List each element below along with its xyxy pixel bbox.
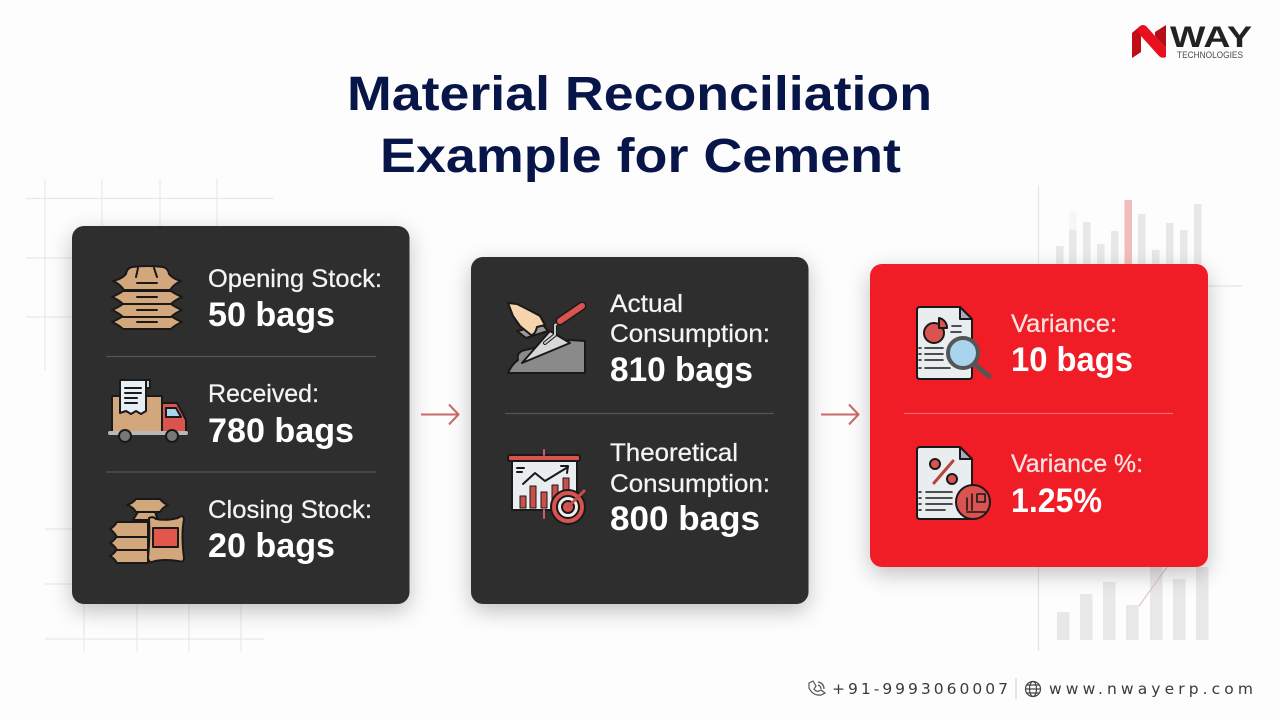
text: closing stock: Closing Stock: bbox=[208, 496, 372, 524]
text: opening stock: Opening Stock: bbox=[208, 265, 382, 293]
text: variance: Variance: bbox=[1011, 310, 1117, 338]
text: actual consumption: 810 bags bbox=[610, 351, 753, 389]
icon: globe bbox=[1026, 682, 1040, 696]
background bar chart upper right bbox=[1038, 185, 1242, 286]
icon: stacked cement bags bbox=[112, 266, 182, 329]
logo: WAY bbox=[1170, 21, 1252, 54]
text: theoretical consumption: 800 bags bbox=[610, 500, 760, 538]
title bbox=[347, 68, 932, 183]
text: closing stock: 20 bags bbox=[208, 527, 335, 565]
icon: delivery truck with receipt bbox=[110, 380, 186, 442]
icon: closing stock bags bbox=[110, 499, 184, 563]
text: theoretical consumption bbox=[610, 439, 770, 538]
panel: variance bbox=[870, 264, 1208, 567]
title: Material Reconciliation bbox=[347, 68, 932, 121]
panel: stock inputs bbox=[72, 226, 410, 604]
icon: chart board with target bbox=[508, 450, 585, 524]
logo: TECHNOLOGIES bbox=[1177, 50, 1243, 61]
text: variance percent bbox=[1011, 450, 1143, 520]
phone number: +91-9993060007 bbox=[832, 680, 1008, 698]
icon: phone bbox=[809, 681, 825, 695]
background bar chart lower right bbox=[1038, 567, 1208, 651]
arrow: stock to consumption bbox=[421, 404, 458, 424]
text: variance bbox=[1011, 310, 1133, 379]
text: opening stock: 50 bags bbox=[208, 296, 335, 334]
background grid left bbox=[26, 179, 274, 652]
text: variance percent: 1.25% bbox=[1011, 482, 1102, 520]
icon: hand with trowel on cement bbox=[508, 303, 585, 373]
text: variance percent: Variance %: bbox=[1011, 450, 1143, 478]
text: actual consumption: Consumption: bbox=[610, 320, 770, 348]
text: theoretical consumption: Theoretical bbox=[610, 439, 738, 467]
text: actual consumption bbox=[610, 290, 770, 389]
website: www.nwayerp.com bbox=[1049, 680, 1253, 698]
panel: consumption bbox=[471, 257, 808, 604]
text: received: Received: bbox=[208, 380, 319, 408]
text: received bbox=[208, 380, 354, 450]
text: theoretical consumption: Consumption: bbox=[610, 470, 770, 498]
icon: report with magnifier bbox=[917, 307, 989, 379]
text: actual consumption: Actual bbox=[610, 290, 683, 318]
icon: percent document bbox=[917, 447, 990, 519]
title: Example for Cement bbox=[380, 130, 901, 183]
text: opening stock bbox=[208, 265, 382, 334]
text: closing stock bbox=[208, 496, 372, 565]
text: received: 780 bags bbox=[208, 412, 354, 450]
logo bbox=[1132, 21, 1252, 61]
text: variance: 10 bags bbox=[1011, 341, 1133, 379]
arrow: consumption to variance bbox=[821, 404, 858, 424]
footer contact bbox=[809, 678, 1253, 699]
